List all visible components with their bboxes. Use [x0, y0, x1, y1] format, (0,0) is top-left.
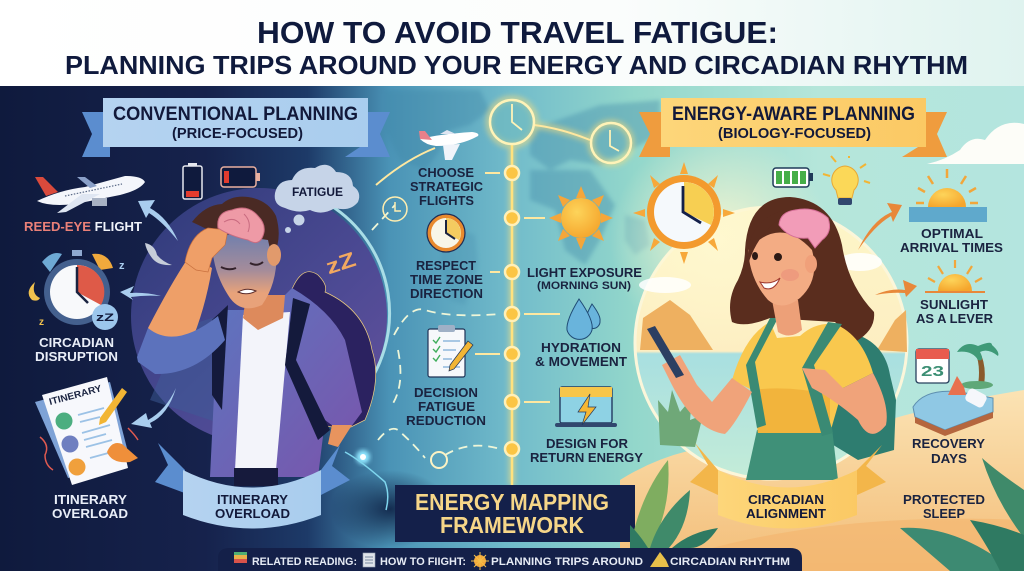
icon: laptop with energy calendar [555, 387, 617, 427]
trousers [234, 468, 278, 486]
illustration: tired traveller [137, 197, 376, 486]
label: red-eye flight: REED-EYE FLIGHT [24, 219, 142, 234]
cloud top right [927, 123, 1024, 164]
thought cloud: fatigue: FATIGUE [292, 185, 343, 199]
timeline: energy mapping [345, 99, 631, 510]
icon: alarm clock: zZ [96, 312, 114, 324]
center labels right [527, 265, 643, 465]
raised arm [148, 255, 212, 362]
label: circadian disruption: CIRCADIAN [39, 335, 114, 350]
icon: small sun [471, 552, 489, 570]
center labels left: CHOOSE [418, 165, 474, 180]
icon: water drops [567, 299, 600, 339]
glowing route node [345, 450, 388, 510]
banner: energy mapping framework [395, 485, 635, 542]
icon: alarm clock: z [39, 317, 44, 328]
footer: related reading bar: HOW TO FIIGHT: [380, 556, 466, 568]
dashed routes [372, 205, 500, 458]
left panel header ribbon [82, 98, 390, 157]
left panel header ribbon: (PRICE-FOCUSED) [172, 125, 303, 142]
brain [779, 209, 830, 248]
icon: clipboard checklist [428, 325, 473, 377]
icon: empty battery vertical [183, 163, 202, 199]
bottom left ribbon [155, 443, 350, 528]
left panel header ribbon: CONVENTIONAL PLANNING [113, 104, 358, 125]
face [212, 232, 277, 308]
bottom right ribbon: ALIGNMENT [746, 506, 826, 521]
hair fringe [748, 210, 819, 265]
hair [192, 197, 279, 258]
center labels left: REDUCTION [406, 413, 486, 428]
label: optimal arrival times: ARRIVAL TIMES [900, 240, 1003, 255]
center labels right: & MOVEMENT [535, 354, 627, 369]
label: optimal arrival times [900, 226, 1003, 255]
phone arm [662, 355, 752, 434]
icon: light bulb [823, 156, 870, 205]
center labels left: DIRECTION [410, 286, 483, 301]
label: circadian disruption [35, 335, 118, 364]
ear [805, 255, 817, 273]
icon: smoke wisp [145, 243, 172, 265]
icon: small pile [650, 552, 669, 567]
banner: energy mapping framework: ENERGY MAPPING [415, 489, 609, 515]
backpack straps [746, 318, 778, 428]
phone [647, 326, 684, 378]
icon: small clock [383, 197, 407, 221]
label: recovery days: DAYS [931, 451, 967, 466]
timeline glow [489, 99, 631, 485]
icon: bed [913, 376, 993, 436]
white t-shirt [235, 312, 290, 470]
icon: main clock [490, 100, 534, 144]
icon: second clock [591, 123, 631, 163]
center labels left: TIME ZONE [410, 272, 483, 287]
sand dunes right [620, 390, 1024, 571]
right panel header ribbon: ENERGY-AWARE PLANNING [672, 104, 915, 125]
label: itinerary overload [52, 492, 128, 521]
center labels right: RETURN ENERGY [530, 450, 643, 465]
foliage [630, 458, 1024, 571]
hand on forehead [185, 228, 228, 272]
footer: related reading bar: RELATED READING: [252, 556, 357, 568]
neck [772, 300, 802, 336]
neck [243, 295, 285, 330]
thought cloud: fatigue [275, 165, 359, 233]
right panel header ribbon [639, 98, 947, 157]
forearm right [328, 425, 352, 447]
label: protected sleep: SLEEP [923, 506, 965, 521]
icon: plane over map [419, 130, 478, 160]
hair back [730, 197, 874, 342]
footer: related reading bar: CIRCADIAN RHYTHM [670, 556, 790, 568]
banner: energy mapping framework: FRAMEWORK [440, 512, 584, 538]
center labels left: STRATEGIC [410, 179, 484, 194]
icon: sun as a lever [925, 260, 985, 293]
center labels left: FLIGHTS [419, 193, 474, 208]
icon: books [234, 552, 247, 563]
label: sunlight as a lever: AS A LEVER [916, 311, 994, 326]
face [748, 232, 814, 306]
center labels right: HYDRATION [541, 340, 621, 355]
label: sunlight as a lever: SUNLIGHT [920, 297, 988, 312]
illustration: energised traveller [647, 197, 896, 480]
title band: PLANNING TRIPS AROUND YOUR ENERGY AND CIRCADIAN RHYTHM [65, 50, 968, 80]
icon: itinerary document [35, 377, 138, 485]
label: sunlight as a lever [916, 297, 994, 326]
icon: sun clock right [633, 162, 735, 264]
arrows: right panel [858, 203, 917, 297]
title band: HOW TO AVOID TRAVEL FATIGUE: [257, 15, 778, 50]
label: protected sleep: PROTECTED [903, 492, 985, 507]
icon: alarm clock: z [119, 260, 125, 272]
title band [0, 0, 1024, 86]
icon: calendar: 23 [921, 363, 944, 380]
bottom right ribbon: CIRCADIAN [748, 492, 824, 507]
icon: calendar [916, 349, 949, 383]
arrows: left panel [120, 200, 178, 428]
icon: sun center [549, 186, 613, 250]
shorts [746, 428, 838, 480]
label: circadian disruption: DISRUPTION [35, 349, 118, 364]
icon: airplane red-eye [35, 176, 145, 213]
label: optimal arrival times: OPTIMAL [921, 226, 983, 241]
other arm [802, 368, 887, 434]
footer: related reading bar: PLANNING TRIPS AROUND [491, 556, 643, 568]
world map [385, 90, 660, 305]
center labels right: DESIGN FOR [546, 436, 629, 451]
right panel header ribbon: (BIOLOGY-FOCUSED) [718, 125, 871, 142]
label: recovery days: RECOVERY [912, 436, 985, 451]
label: itinerary overload: OVERLOAD [52, 506, 128, 521]
icon: notepad [363, 553, 375, 567]
eyes and smile [752, 252, 758, 260]
ear [267, 244, 281, 266]
panel: conventional scene circle [131, 188, 390, 444]
icon: sunrise over water [909, 169, 987, 222]
label: recovery days [912, 436, 985, 466]
center labels left: RESPECT [416, 258, 476, 273]
icon: clock respect time zone [427, 214, 465, 252]
footer: related reading bar [218, 548, 802, 571]
backpack [825, 335, 896, 460]
label: itinerary overload: ITINERARY [54, 492, 127, 507]
t-shirt [732, 322, 873, 433]
label: protected sleep [903, 492, 985, 521]
bottom left ribbon: ITINERARY [217, 492, 288, 507]
panel: energy-aware scene circle [610, 130, 907, 479]
shirt [210, 288, 362, 477]
icon: palm tree [957, 343, 998, 389]
icon: alarm clock [29, 250, 125, 330]
icon: low battery horizontal [221, 167, 260, 187]
center labels left: FATIGUE [418, 399, 475, 414]
center labels right: LIGHT EXPOSURE [527, 265, 642, 280]
backpack [288, 272, 376, 430]
branches [475, 173, 560, 402]
center labels right: (MORNING SUN) [537, 280, 631, 292]
bottom right ribbon [690, 443, 886, 528]
zzz: zZ [323, 248, 359, 279]
center labels left: DECISION [414, 385, 478, 400]
timeline nodes [505, 166, 519, 456]
center labels left [406, 165, 486, 428]
straps [212, 305, 228, 410]
icon: full battery [773, 168, 813, 187]
closed eyes and mouth [221, 262, 263, 269]
bottom left ribbon: OVERLOAD [215, 506, 290, 521]
icon: itinerary document: ITINERARY [48, 383, 104, 408]
brain [218, 208, 264, 243]
